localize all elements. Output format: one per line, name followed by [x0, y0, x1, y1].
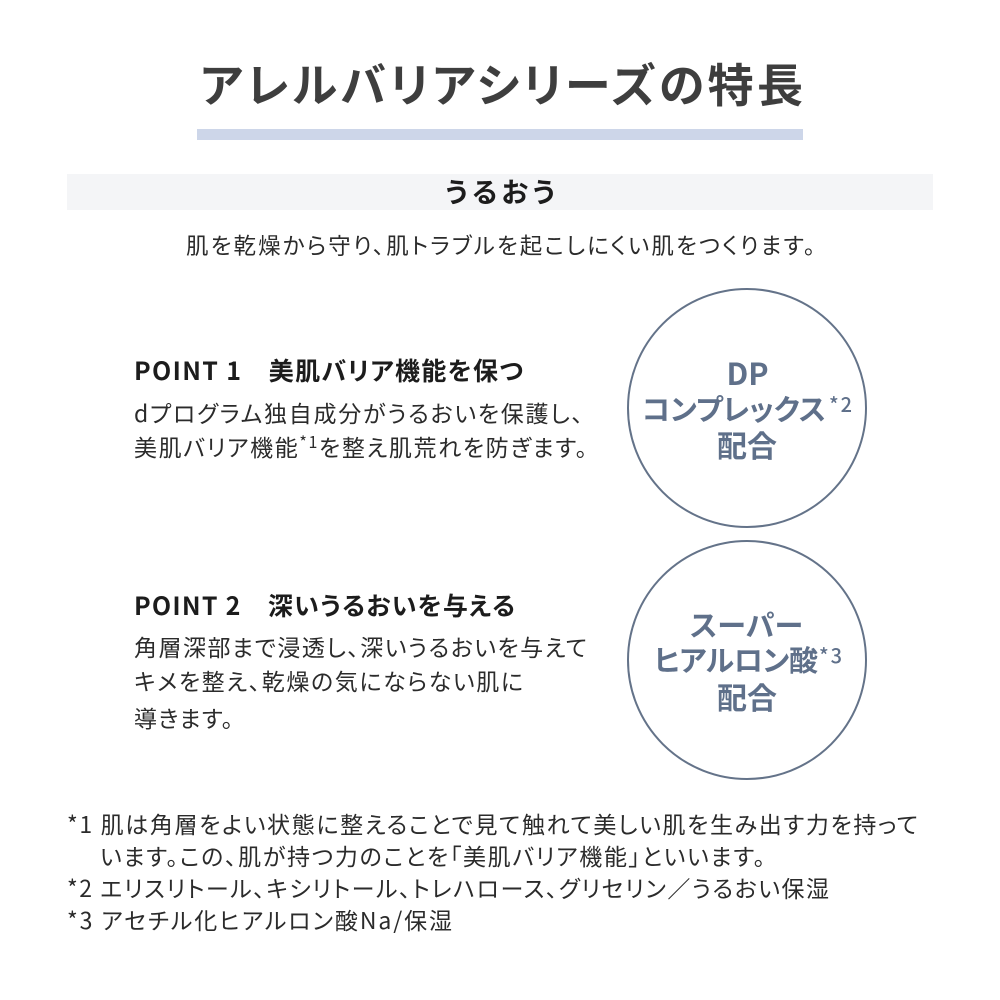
circle badge: DP complex: 配合 [717, 422, 777, 466]
footnotes [67, 806, 918, 936]
point 1 body: *1 [299, 429, 317, 453]
point 2 heading: POINT 2 深いうるおいを与える [134, 587, 515, 623]
point 1 body: dプログラム独自成分がうるおいを保護し、 [134, 395, 583, 429]
point 2 text block [134, 587, 587, 734]
circle badge: DP complex: *2 [829, 389, 852, 418]
point 2 body: 角層深部まで浸透し、深いうるおいを与えて [134, 629, 587, 663]
circle badge: DP complex [628, 289, 866, 527]
point 2 body [134, 629, 587, 734]
point 1 text block [134, 352, 587, 463]
section description: 肌を乾燥から守り、肌トラブルを起こしにくい肌をつくります。 [186, 229, 815, 261]
point 2 body: 導きます。 [134, 700, 233, 734]
section heading: うるおう [445, 170, 555, 210]
point 1 body: を整え肌荒れを防ぎます。 [319, 429, 587, 463]
point 2 body: キメを整え、乾燥の気にならない肌に [134, 663, 523, 697]
circle badge: DP complex: コンプレックス [642, 387, 826, 429]
point 1 body: 美肌バリア機能 [134, 429, 298, 463]
footnotes: *3 アセチル化ヒアルロン酸Na/保湿 [67, 902, 452, 936]
point 1 heading: POINT 1 美肌バリア機能を保つ [134, 352, 523, 388]
circle badge: Super hyaluronic acid [628, 541, 866, 779]
title: アレルバリアシリーズの特長 [200, 50, 803, 116]
circle badge: Super hyaluronic acid: ヒアルロン酸 [654, 638, 818, 680]
footnotes: *1 肌は角層をよい状態に整えることで見て触れて美しい肌を生み出す力を持って [67, 806, 918, 840]
footnotes: *2 エリスリトール、キシリトール、トレハロース、グリセリン／うるおい保湿 [67, 870, 829, 904]
title underline bar [197, 129, 803, 140]
circle badge: Super hyaluronic acid: *3 [819, 640, 842, 669]
footnotes: います。この、肌が持つ力のことを「美肌バリア機能」といいます。 [100, 838, 765, 872]
circle badge: Super hyaluronic acid: スーパー [690, 603, 803, 645]
point 1 body [134, 395, 587, 463]
circle badge: DP complex: DP [726, 350, 769, 394]
section heading band [67, 170, 933, 210]
circle badge: Super hyaluronic acid: 配合 [717, 674, 777, 718]
